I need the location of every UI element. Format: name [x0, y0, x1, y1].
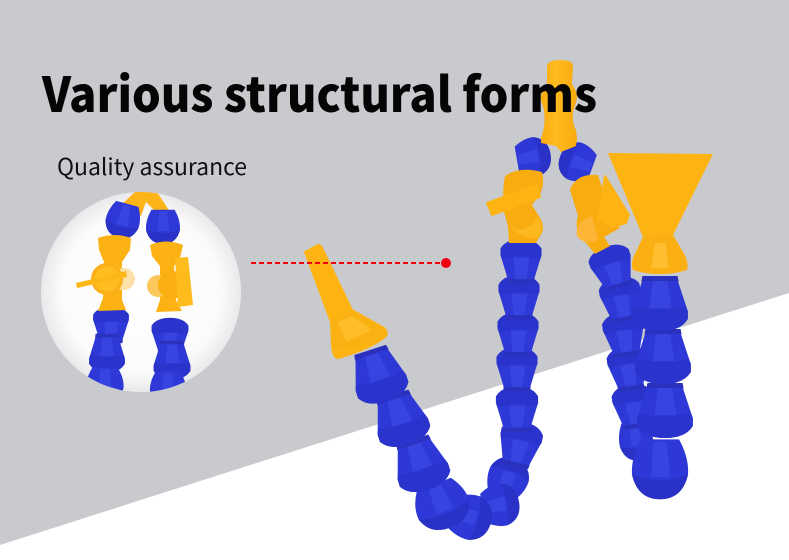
left valve [487, 170, 543, 243]
nozzle: Y connector [541, 60, 577, 152]
blue balls at Y connector [514, 135, 599, 186]
rear right hose segments [586, 240, 656, 463]
inset circle background [41, 192, 241, 392]
product photo: flexible coolant hoses [305, 60, 713, 544]
inset blue hoses [86, 199, 190, 406]
inset left valve [76, 235, 135, 311]
nozzle: fan funnel [608, 153, 713, 274]
left hose segments [345, 239, 545, 544]
front right hose segments [632, 276, 693, 499]
inset product photo [76, 192, 193, 406]
inset right valve [147, 242, 193, 312]
subheading: Quality assurance [57, 148, 247, 182]
nozzle: round left tip [305, 245, 387, 358]
heading: Various structural forms [41, 56, 597, 126]
right valve [570, 175, 629, 254]
inset Y connector [122, 192, 170, 216]
inset circle: valve detail [41, 192, 241, 406]
callout: dotted pointer line [251, 258, 451, 268]
